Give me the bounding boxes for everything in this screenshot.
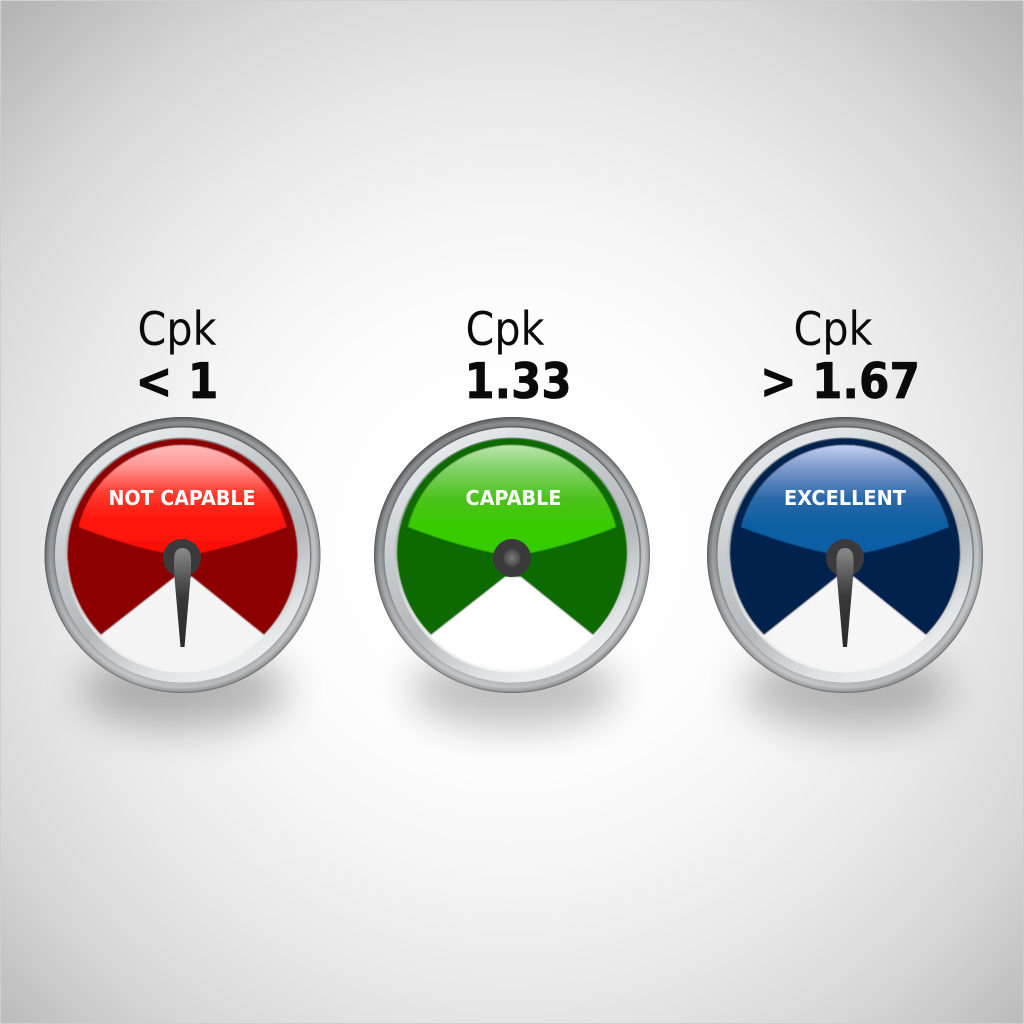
label: Cpk > 1.67: > 1.67 xyxy=(760,353,920,410)
gloss xyxy=(78,445,286,553)
hub xyxy=(493,539,531,577)
gloss xyxy=(408,445,616,553)
gauge: not capable xyxy=(44,302,320,728)
label: Cpk < 1: Cpk xyxy=(138,302,217,356)
gloss xyxy=(741,445,949,553)
label: Cpk < 1 xyxy=(136,302,218,410)
label: Cpk 1.33 xyxy=(464,302,572,410)
bezel xyxy=(44,417,320,693)
label: Cpk > 1.67: Cpk xyxy=(794,302,873,356)
needle xyxy=(836,548,854,647)
bezel xyxy=(374,417,650,693)
gauge: excellent xyxy=(707,302,983,728)
gauge: capable xyxy=(374,302,650,728)
dial xyxy=(730,438,960,670)
needle xyxy=(174,548,191,647)
shadow xyxy=(80,652,288,728)
bezel xyxy=(707,417,983,693)
label: Cpk > 1.67 xyxy=(760,302,920,410)
hub xyxy=(826,539,864,577)
shadow xyxy=(743,652,951,728)
label: Cpk 1.33: Cpk xyxy=(466,302,545,356)
label: Cpk < 1: < 1 xyxy=(136,353,218,410)
status text: EXCELLENT xyxy=(784,486,906,510)
label: Cpk 1.33: 1.33 xyxy=(464,353,572,410)
shadow xyxy=(410,652,618,728)
status text: NOT CAPABLE xyxy=(108,486,256,510)
hub xyxy=(163,539,201,577)
dial xyxy=(67,439,297,670)
dial xyxy=(397,438,627,670)
status text: CAPABLE xyxy=(466,486,562,510)
